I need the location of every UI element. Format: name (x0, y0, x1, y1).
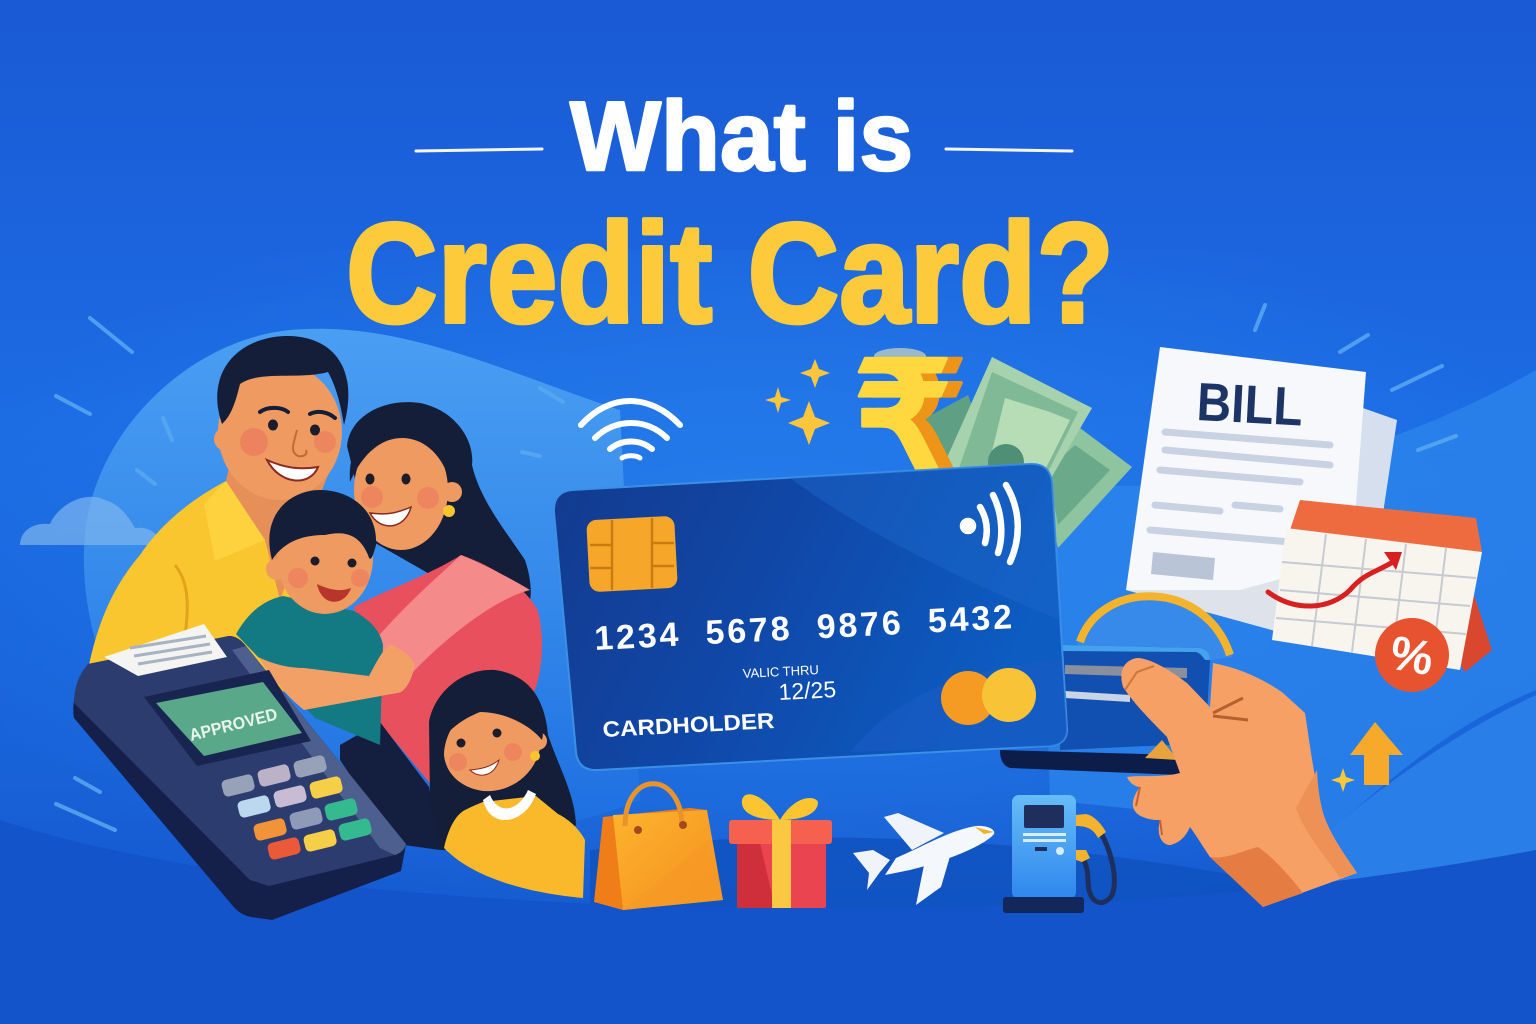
sparkles (765, 359, 830, 445)
receipt (104, 624, 227, 676)
calendar (1268, 500, 1492, 692)
girl (429, 670, 585, 898)
bill document: BILL (1195, 372, 1304, 438)
valid thru: VALIC THRU (742, 662, 819, 681)
shopping bag (594, 784, 723, 910)
boy (236, 490, 415, 745)
rupee symbol: ₹ (870, 334, 965, 502)
banknotes (907, 357, 1132, 548)
family (86, 336, 585, 898)
airplane (853, 813, 994, 905)
card reader arc (1070, 594, 1233, 660)
cardholder: CARDHOLDER (602, 708, 775, 742)
title: Credit Card?: Credit Card? (346, 194, 1114, 353)
fuel pump (1003, 795, 1114, 913)
card network logo (941, 668, 1036, 725)
contactless icon on card (963, 485, 1018, 562)
trousers (340, 722, 440, 850)
mother (347, 402, 542, 787)
expiry: 12/25 (778, 676, 837, 705)
chip (586, 516, 678, 592)
gift box (729, 794, 832, 908)
cloud (20, 497, 160, 545)
rupee symbol: ₹ (855, 334, 950, 502)
POS terminal: APPROVED (187, 705, 279, 745)
card number: 1234 5678 9876 5432 (593, 598, 1013, 658)
up arrow (1350, 722, 1403, 785)
title: What is: What is (570, 81, 913, 191)
calendar: % (1386, 627, 1437, 686)
contactless waves (581, 401, 680, 458)
hand holding card (1000, 645, 1357, 907)
small sparkle (1331, 768, 1355, 792)
father (86, 336, 348, 710)
credit card (554, 464, 1067, 770)
accent strokes (56, 305, 1456, 830)
bill document (1126, 347, 1397, 650)
POS terminal (73, 624, 406, 920)
